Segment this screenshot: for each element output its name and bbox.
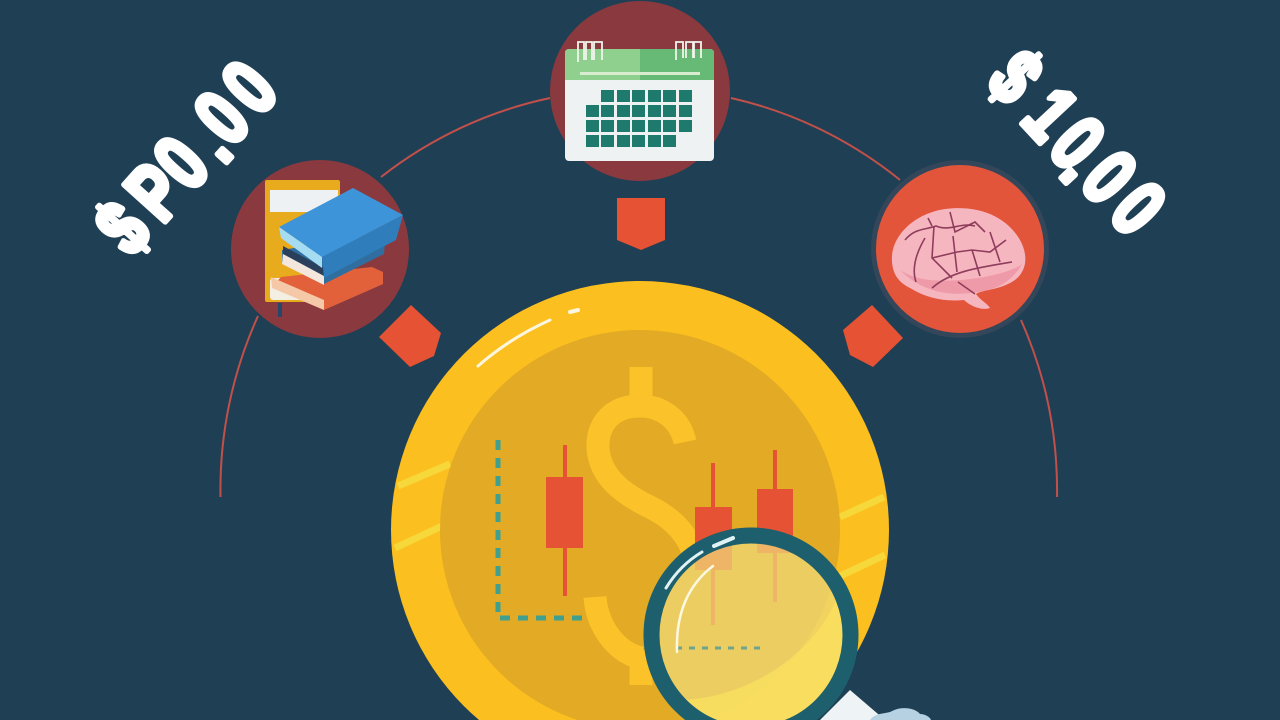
coin [391,281,889,720]
hand [870,708,931,720]
connecting arc [220,98,1057,497]
lens [651,535,851,720]
dollar sign [595,367,695,685]
handle [820,690,885,720]
icon: books [231,160,409,338]
lens glare [666,538,733,652]
pointer: calendar to coin [617,198,665,250]
label: price low: $P0.00 [78,45,298,274]
icon: calendar [550,1,730,181]
coin stripes [395,464,885,576]
icon: brain [871,160,1049,338]
pointer: brain to coin [843,305,903,367]
candlestick chart [546,445,793,625]
coin highlight [478,310,578,366]
label: price high: $10.00 [966,34,1183,256]
magnifying glass [651,535,931,720]
pointer: books to coin [379,305,441,367]
chart axis [498,440,585,618]
